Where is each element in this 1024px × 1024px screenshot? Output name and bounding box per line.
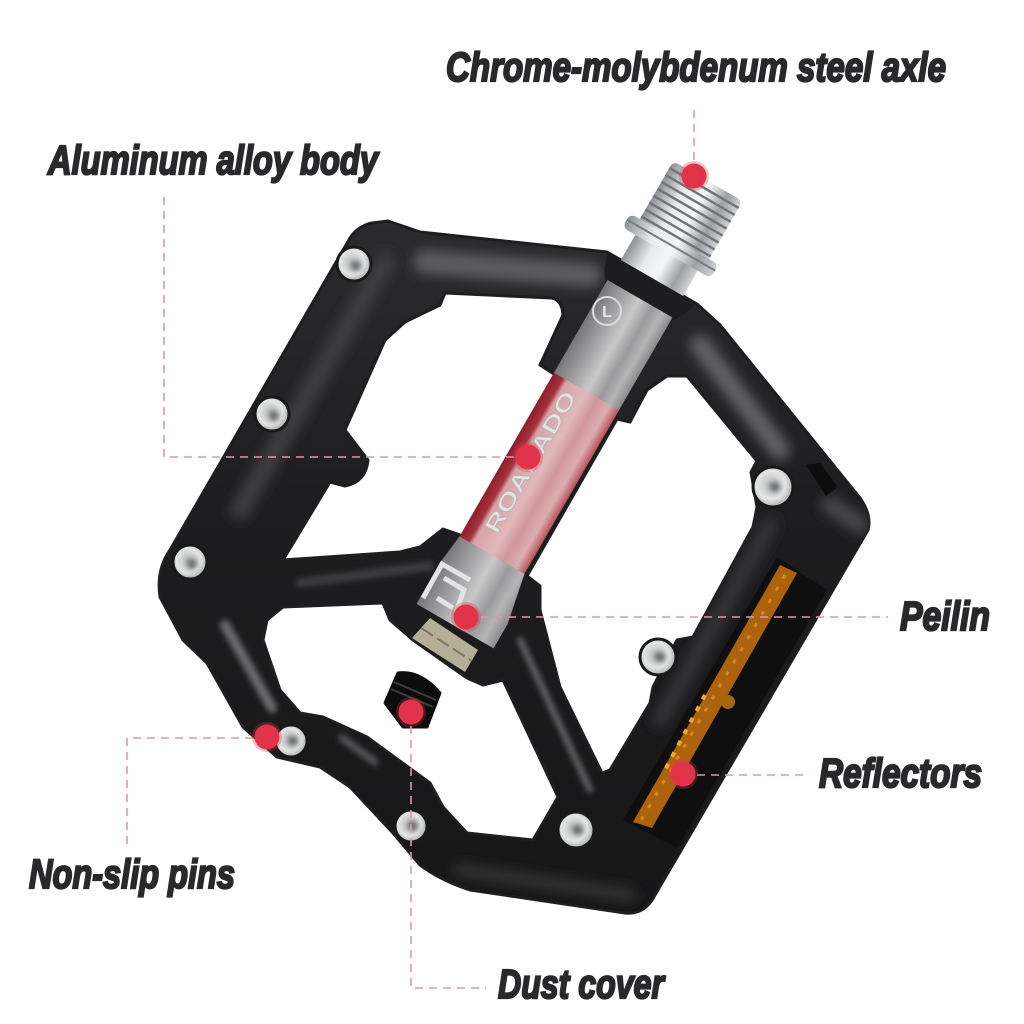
dust cover bbox=[385, 673, 440, 727]
beige nut bbox=[412, 618, 478, 672]
red tube section bbox=[459, 373, 619, 575]
axle assembly bbox=[408, 156, 752, 672]
side mark L: L bbox=[602, 304, 612, 321]
leader line: aluminum alloy body bbox=[164, 197, 528, 457]
reflector recess and amber reflector strip bbox=[623, 557, 827, 848]
leader line: Peilin bbox=[466, 616, 888, 618]
label: non-slip pins: Non-slip pins bbox=[29, 851, 235, 897]
tube brand text: ROADADO bbox=[480, 386, 581, 538]
pedal body bbox=[159, 221, 869, 913]
leader line: axle bbox=[693, 110, 695, 176]
leader line: non-slip pins bbox=[127, 738, 267, 850]
flange and neck bbox=[605, 214, 719, 309]
logo mark bbox=[423, 564, 470, 612]
label: Peilin: Peilin bbox=[900, 593, 990, 639]
leader line: dust cover bbox=[411, 712, 486, 988]
body highlights bbox=[225, 262, 860, 895]
screws and pins bbox=[173, 247, 793, 848]
corner slot bbox=[806, 463, 838, 496]
black end cap bbox=[594, 252, 696, 328]
leader line: reflectors bbox=[683, 774, 806, 776]
label: aluminum body: Aluminum alloy body bbox=[47, 137, 380, 183]
side mark L bbox=[593, 297, 621, 325]
gray tube section bbox=[554, 280, 672, 411]
marker dots bbox=[252, 161, 709, 789]
label: reflectors: Reflectors bbox=[819, 750, 982, 796]
lower gray collar bbox=[416, 535, 534, 648]
threaded end bbox=[637, 161, 743, 263]
label: dust cover: Dust cover bbox=[498, 961, 666, 1007]
